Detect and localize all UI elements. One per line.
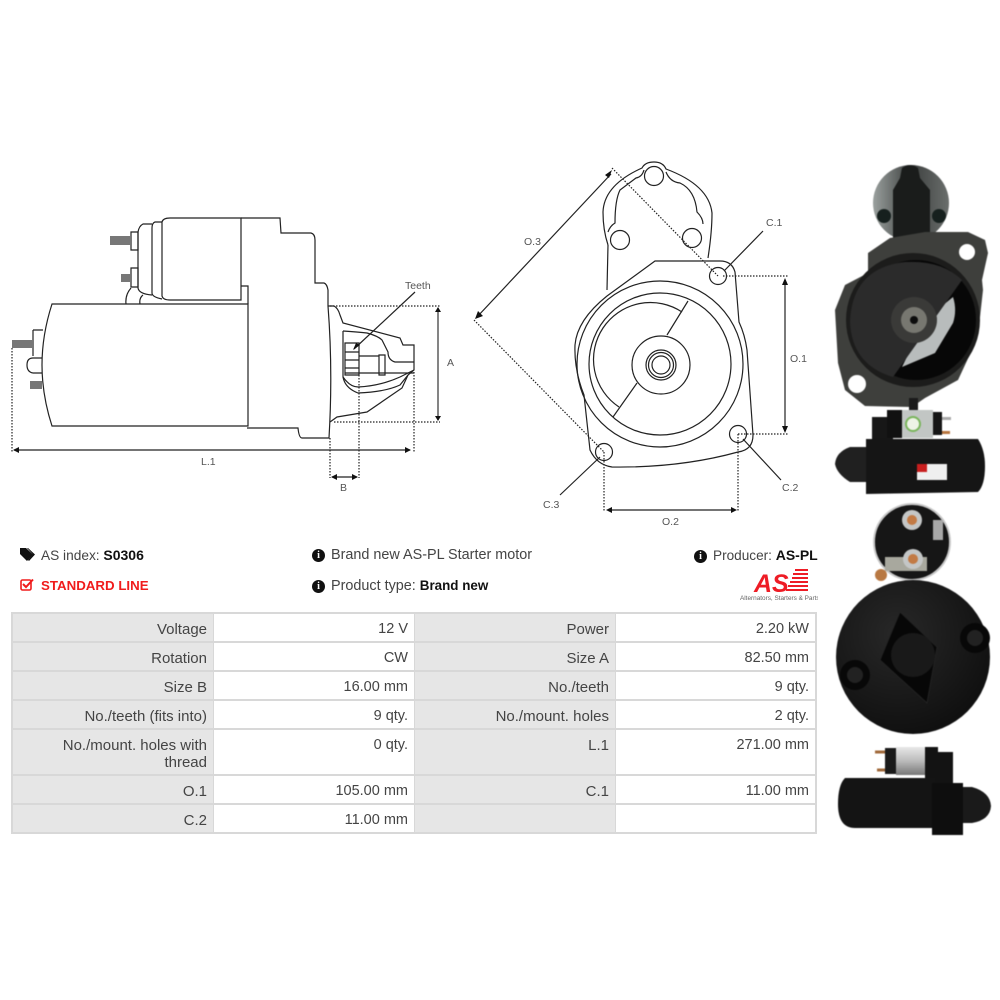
row: O.1, C.1: [13, 776, 815, 803]
AS logo: AS: [753, 570, 789, 598]
info: description: Brand new AS-PL Starter motor: [331, 547, 532, 563]
dimension O.1: O.1: [790, 353, 807, 365]
row: rotation, size A: [13, 643, 815, 670]
row: O.1, C.1: 105.00 mm: [335, 783, 408, 799]
label: Teeth: [353, 280, 431, 350]
dimension O.3: O.3: [524, 236, 541, 248]
dimension B: [330, 375, 359, 494]
info: AS index: AS index: S0306: [41, 547, 144, 563]
row: C.2: [13, 805, 815, 832]
dimension O.2: O.2: [662, 516, 679, 528]
photo: starter front view: [835, 165, 988, 410]
dimension L.1: [12, 348, 414, 468]
dimension A: A: [447, 357, 454, 369]
row: rotation, size A: Rotation: [151, 650, 207, 667]
dimension L.1: L.1: [201, 456, 216, 468]
row: teeth fits into, mount holes: No./teeth (fits into): [84, 708, 207, 725]
dimension O.2: [604, 434, 738, 528]
row: voltage, power: Voltage: [157, 621, 207, 638]
row: teeth fits into, mount holes: No./mount. holes: [496, 708, 609, 725]
row: holes with thread, L.1: 271.00 mm: [736, 737, 809, 753]
row: holes with thread, L.1: L.1: [588, 737, 609, 754]
row: rotation, size A: Size A: [566, 650, 609, 667]
row: size B, teeth: 16.00 mm: [344, 679, 408, 695]
row: holes with thread, L.1: thread: [164, 754, 207, 771]
row: teeth fits into, mount holes: 9 qty.: [374, 708, 408, 724]
row: holes with thread, L.1: No./mount. holes with: [63, 737, 207, 754]
callouts C.1 C.2 C.3: C.2: [782, 482, 798, 494]
starter motor side outline: [12, 218, 414, 438]
front view technical drawing: [474, 161, 807, 528]
callouts C.1 C.2 C.3: C.1: [766, 217, 782, 229]
AS logo: Alternators, Starters & Parts: [740, 595, 818, 602]
dimension A: [330, 306, 454, 422]
row: O.1, C.1: C.1: [586, 783, 609, 800]
info: description: i: [317, 550, 320, 561]
info: standard line: STANDARD LINE: [41, 578, 149, 593]
side view technical drawing: [11, 217, 454, 494]
row: size B, teeth: [13, 672, 815, 699]
row: O.1, C.1: 11.00 mm: [746, 783, 809, 799]
row: size B, teeth: 9 qty.: [775, 679, 809, 695]
row: O.1, C.1: O.1: [183, 783, 207, 800]
dimension O.1: [723, 276, 807, 434]
info: product type: i: [317, 581, 320, 592]
row: voltage, power: 12 V: [378, 621, 408, 637]
row: teeth fits into, mount holes: 2 qty.: [775, 708, 809, 724]
row: C.2: 11.00 mm: [345, 812, 408, 828]
row: teeth fits into, mount holes: [13, 701, 815, 728]
dimension B: B: [340, 482, 347, 494]
row: size B, teeth: Size B: [164, 679, 207, 696]
row: holes with thread, L.1: 0 qty.: [374, 737, 408, 753]
photo: starter rear view: [836, 504, 990, 734]
dimension O.3: [474, 168, 718, 452]
label: Teeth: Teeth: [405, 280, 431, 292]
photo: starter side view with label: [835, 410, 985, 494]
row: holes with thread, L.1: [13, 730, 815, 774]
row: C.2: C.2: [184, 812, 207, 829]
info: producer: i: [699, 551, 702, 562]
info: product type: Product type: Brand new: [331, 578, 488, 594]
photo: starter side view mirrored: [838, 747, 991, 835]
row: voltage, power: Power: [566, 621, 609, 638]
row: rotation, size A: CW: [384, 650, 408, 666]
row: rotation, size A: 82.50 mm: [745, 650, 809, 666]
callouts C.1 C.2 C.3: C.3: [543, 499, 560, 511]
row: voltage, power: 2.20 kW: [756, 621, 809, 637]
row: voltage, power: [13, 614, 815, 641]
info: producer: Producer: AS-PL: [713, 547, 818, 563]
specification table: [11, 612, 817, 834]
product photos: [834, 164, 992, 836]
mounting flange outline: [575, 162, 753, 467]
AS logo: [740, 569, 818, 602]
callouts C.1 C.2 C.3: [543, 217, 798, 511]
row: size B, teeth: No./teeth: [548, 679, 609, 696]
